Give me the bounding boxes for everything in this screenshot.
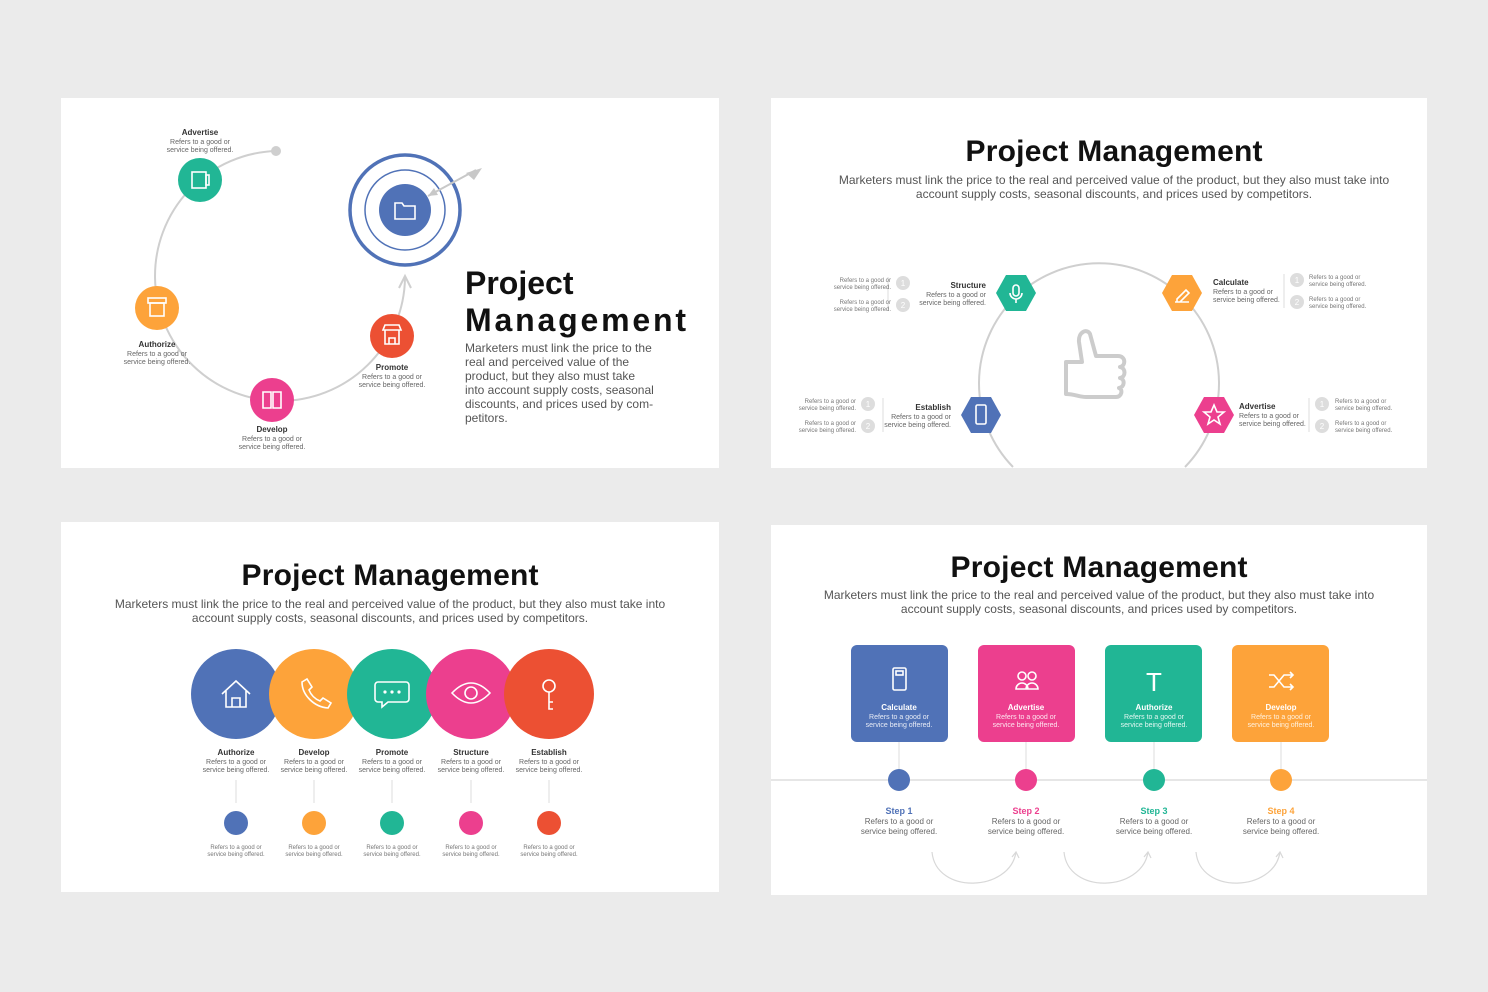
hex: Establish (799, 397, 1001, 434)
step 4 (1232, 645, 1329, 836)
subtitle (824, 588, 1374, 616)
node: Promote (359, 314, 425, 389)
panel: hexagon circle (771, 98, 1427, 468)
description: product, but they also must take (465, 369, 635, 383)
subtitle (839, 173, 1389, 201)
node: Advertise: Advertise (182, 128, 219, 137)
description: into account supply costs, seasonal (465, 383, 654, 397)
step 1: Refers to a good or (865, 817, 934, 826)
circle: Promote: service being offered. (359, 767, 425, 774)
step 2: Refers to a good or (996, 714, 1057, 721)
step 2: Step 2 (1012, 806, 1040, 816)
circle: Structure: Refers to a good or (441, 759, 502, 766)
circle: Structure: service being offered. (442, 852, 500, 858)
node: Advertise (167, 128, 233, 202)
subtitle: account supply costs, seasonal discounts, and prices used by competitors. (901, 602, 1297, 616)
step 4: Develop (1265, 703, 1297, 712)
circle: Develop: Refers to a good or (284, 759, 345, 766)
hex: Calculate: service being offered. (1309, 304, 1367, 310)
step 3: Step 3 (1140, 806, 1168, 816)
circle: Develop: service being offered. (285, 852, 343, 858)
node: Authorize: Refers to a good or (127, 351, 188, 358)
subtitle (115, 597, 665, 625)
title: Management (465, 302, 686, 338)
step 2: Advertise (1008, 703, 1045, 712)
hex: Advertise: Refers to a good or (1239, 413, 1300, 420)
circle: Establish: Refers to a good or (523, 845, 575, 851)
title: Project Management (966, 135, 1262, 168)
step 4: Refers to a good or (1251, 714, 1312, 721)
step 4: service being offered. (1248, 722, 1314, 729)
step 1 (851, 645, 948, 836)
circle: Promote: Promote (376, 748, 409, 757)
step 3: T (1146, 667, 1162, 697)
step 4: service being offered. (1243, 827, 1319, 836)
hex: Structure: service being offered. (919, 300, 986, 307)
title: Project Management (950, 551, 1248, 584)
circle: Structure: Structure (453, 748, 489, 757)
description: real and perceived value of the (465, 355, 629, 369)
step 1: service being offered. (861, 827, 937, 836)
step 3: Refers to a good or (1124, 714, 1185, 721)
description (465, 341, 654, 425)
circle: Authorize (191, 649, 281, 858)
hex: Structure: Structure (950, 281, 987, 290)
hex: Advertise: 1 (1320, 400, 1325, 409)
circle: Establish: Refers to a good or (519, 759, 580, 766)
step 2: service being offered. (993, 722, 1059, 729)
hex: Calculate: service being offered. (1213, 297, 1280, 304)
arc path with arrow (155, 146, 411, 401)
hex: Structure: service being offered. (834, 285, 891, 291)
hex: Establish: service being offered. (884, 422, 951, 429)
hex: Establish: Refers to a good or (805, 421, 856, 427)
subtitle: Marketers must link the price to the real and perceived value of the product, but they also must take into (115, 597, 665, 611)
hex: Calculate: 2 (1295, 298, 1300, 307)
hex: Structure: 2 (901, 301, 906, 310)
circle: Structure: Refers to a good or (445, 845, 497, 851)
node: Authorize: Authorize (139, 340, 176, 349)
hex: Establish: 1 (866, 400, 871, 409)
node: Promote: Promote (376, 363, 409, 372)
hex: Structure: Refers to a good or (840, 300, 891, 306)
big circle (979, 263, 1219, 467)
hex: Advertise: service being offered. (1335, 428, 1393, 434)
title: Project (465, 265, 574, 301)
hex: Advertise: service being offered. (1239, 421, 1306, 428)
circle: Establish (504, 649, 594, 858)
node: Develop: Develop (256, 425, 288, 434)
step 4: Step 4 (1267, 806, 1295, 816)
hex: Structure: Refers to a good or (840, 278, 891, 284)
hex: Advertise: service being offered. (1335, 406, 1393, 412)
node: Develop: service being offered. (239, 444, 305, 451)
circle: Promote: service being offered. (363, 852, 421, 858)
step 1: service being offered. (866, 722, 932, 729)
subtitle: Marketers must link the price to the real and perceived value of the product, but they also must take into (839, 173, 1389, 187)
hex: Calculate: 1 (1295, 276, 1300, 285)
hex: Calculate: Calculate (1213, 278, 1249, 287)
hex: Advertise: Advertise (1239, 402, 1276, 411)
target icon (350, 155, 482, 265)
hex: Structure: service being offered. (834, 307, 891, 313)
circle: Authorize: Refers to a good or (206, 759, 267, 766)
circle: Establish: Establish (531, 748, 567, 757)
step 3: Refers to a good or (1120, 817, 1189, 826)
hex: Calculate: Refers to a good or (1309, 297, 1360, 303)
step 3: Authorize (1136, 703, 1173, 712)
circle: Develop: service being offered. (281, 767, 347, 774)
icon: thumbs up (1066, 331, 1124, 397)
step 2: Refers to a good or (992, 817, 1061, 826)
circle: Develop: Develop (298, 748, 330, 757)
node: Advertise: Refers to a good or (170, 139, 231, 146)
hex: Establish: 2 (866, 422, 871, 431)
step 1: Calculate (881, 703, 917, 712)
hex: Advertise: Refers to a good or (1335, 399, 1386, 405)
circle: Authorize: Refers to a good or (210, 845, 262, 851)
node: Advertise: service being offered. (167, 147, 233, 154)
node: Develop: Refers to a good or (242, 436, 303, 443)
hex: Calculate: service being offered. (1309, 282, 1367, 288)
step 3: service being offered. (1116, 827, 1192, 836)
hex: Establish: Establish (915, 403, 951, 412)
circle: Promote (347, 649, 437, 858)
step 2: service being offered. (988, 827, 1064, 836)
circle: Promote: Refers to a good or (362, 759, 423, 766)
panel: step cards (771, 525, 1427, 895)
panel: circular path (61, 98, 719, 468)
step 3 (1105, 645, 1202, 836)
hex: Calculate: Refers to a good or (1213, 289, 1274, 296)
arrows: curved connectors (932, 852, 1283, 883)
circle: Establish: service being offered. (516, 767, 582, 774)
step 3: service being offered. (1121, 722, 1187, 729)
node: Promote: service being offered. (359, 382, 425, 389)
title: Project Management (242, 559, 538, 592)
hex: Advertise: Refers to a good or (1335, 421, 1386, 427)
circle: Authorize: Authorize (218, 748, 255, 757)
hex: Establish: service being offered. (799, 406, 856, 412)
circle: Authorize: service being offered. (207, 852, 265, 858)
title (465, 265, 686, 338)
hex: Calculate (1162, 273, 1367, 311)
circle: Structure: service being offered. (438, 767, 504, 774)
hex: Calculate: Refers to a good or (1309, 275, 1360, 281)
step 1: Refers to a good or (869, 714, 930, 721)
node: Develop (239, 378, 305, 451)
circle: Structure (426, 649, 516, 858)
node: Promote: Refers to a good or (362, 374, 423, 381)
circle: Develop (269, 649, 359, 858)
step 2 (978, 645, 1075, 836)
panel: overlapping circles (61, 522, 719, 892)
subtitle: account supply costs, seasonal discounts, and prices used by competitors. (192, 611, 588, 625)
node: Authorize: service being offered. (124, 359, 190, 366)
subtitle: Marketers must link the price to the real and perceived value of the product, but they also must take into (824, 588, 1374, 602)
circle: Establish: service being offered. (520, 852, 578, 858)
hex: Structure: 1 (901, 279, 906, 288)
hex: Advertise: 2 (1320, 422, 1325, 431)
subtitle: account supply costs, seasonal discounts, and prices used by competitors. (916, 187, 1312, 201)
node: Authorize (124, 286, 190, 366)
circle: Authorize: service being offered. (203, 767, 269, 774)
step 1: Step 1 (885, 806, 913, 816)
hex: Structure (834, 275, 1036, 313)
step 4: Refers to a good or (1247, 817, 1316, 826)
hex: Establish: Refers to a good or (805, 399, 856, 405)
description: Marketers must link the price to the (465, 341, 652, 355)
hex: Structure: Refers to a good or (926, 292, 987, 299)
hex: Establish: Refers to a good or (891, 414, 952, 421)
circle: Develop: Refers to a good or (288, 845, 340, 851)
hex: Establish: service being offered. (799, 428, 856, 434)
description: petitors. (465, 411, 508, 425)
circle: Promote: Refers to a good or (366, 845, 418, 851)
description: discounts, and prices used by com- (465, 397, 653, 411)
hex: Advertise (1194, 397, 1393, 434)
